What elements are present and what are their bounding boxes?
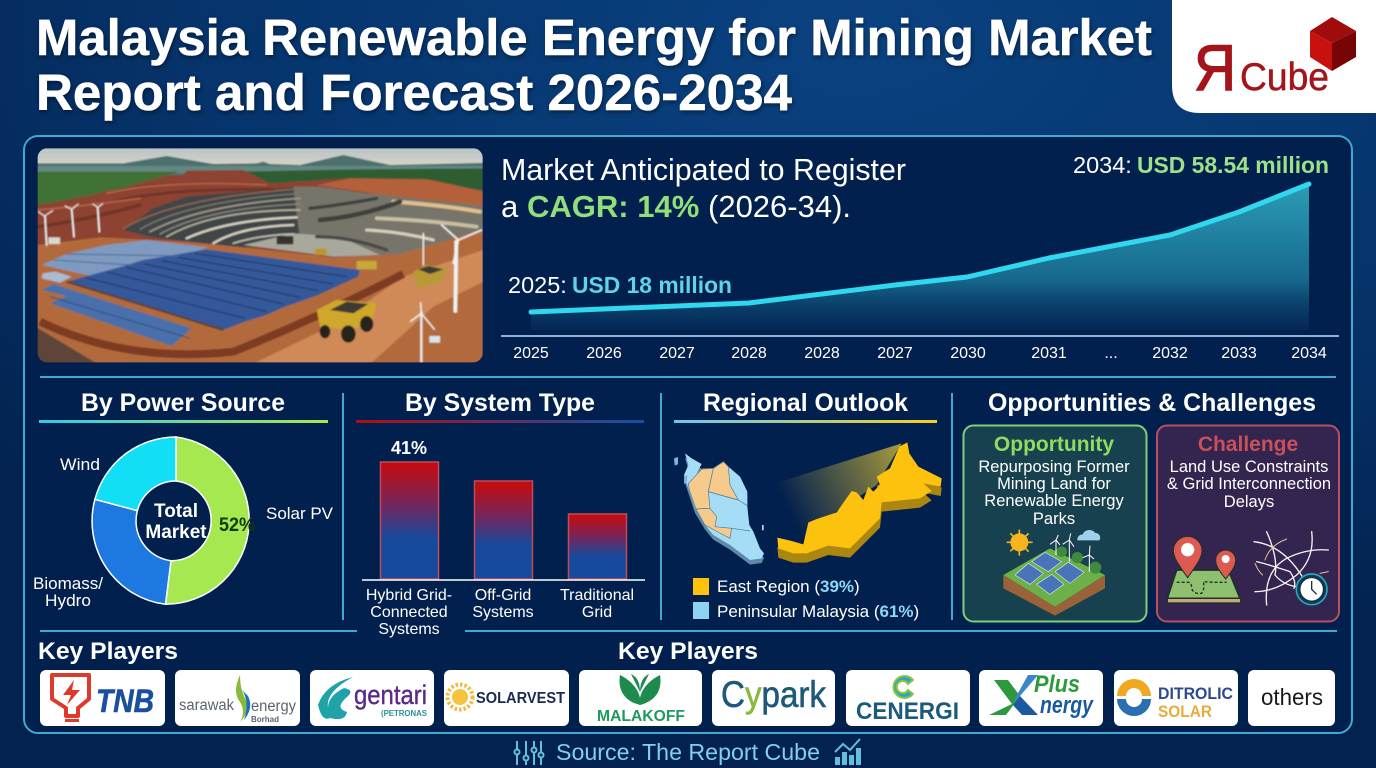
donut chart: power source share: Biomass/	[33, 575, 103, 593]
logo card: Ditrolic Solar	[1114, 670, 1238, 726]
heading: By System Type	[356, 389, 644, 423]
heading: Key Players left: Key Players	[38, 638, 178, 665]
heading: By System Type: By System Type	[405, 389, 595, 417]
heading: Opportunities and Challenges: Opportunities & Challenges	[988, 389, 1316, 417]
logo card: Gentari: gentari	[354, 680, 427, 710]
logo card: Gentari	[310, 670, 434, 726]
market growth heading: Market Anticipated to Register	[501, 152, 906, 187]
logo card: Ditrolic Solar: SOLAR	[1158, 702, 1212, 721]
icon: rising bar chart	[835, 739, 861, 765]
logo card: Sarawak Energy: sarawak	[179, 697, 234, 714]
logo card: others	[1248, 670, 1335, 726]
logo card: Sarawak Energy: energy	[251, 698, 296, 715]
bar chart: system type: Systems	[378, 621, 440, 638]
source line: Source: The Report Cube	[556, 739, 820, 765]
line chart: market size forecast: 2025	[513, 345, 549, 362]
bar chart: system type: Connected	[370, 604, 448, 621]
panel: challenge: & Grid Interconnection	[1167, 475, 1331, 493]
logo card: XPlus Energy: Plus	[1034, 671, 1080, 698]
logo card: Cenergi	[846, 670, 970, 726]
donut chart: power source share: Market	[145, 522, 207, 543]
line chart: market size forecast: 2026	[586, 345, 622, 362]
line chart: market size forecast: 2034:	[1073, 152, 1132, 178]
logo card: others: others	[1261, 684, 1323, 710]
line chart: market size forecast: 2027	[659, 345, 695, 362]
icon: map with location pins	[1167, 536, 1241, 603]
heading: Key Players right: Key Players	[618, 638, 758, 665]
logo card: Gentari: (PETRONAS	[381, 709, 428, 718]
line chart: market size forecast: ...	[1104, 345, 1118, 362]
donut chart: power source share: Hydro	[45, 592, 91, 610]
donut chart: power source share: Total	[154, 501, 198, 522]
map legend: 61%)	[880, 602, 919, 621]
panel: opportunity	[964, 426, 1146, 622]
logo card: XPlus Energy	[979, 670, 1103, 726]
market growth heading: a	[501, 189, 519, 224]
logo card: XPlus Energy: nergy	[1040, 692, 1094, 719]
logo card: Cypark	[712, 670, 835, 726]
map legend	[693, 577, 919, 621]
line chart: market size forecast	[501, 152, 1339, 362]
line chart: market size forecast: 2033	[1221, 345, 1257, 362]
bar chart: system type: Off-Grid	[475, 587, 531, 604]
line chart: market size forecast: USD 58.54 million	[1137, 152, 1329, 178]
donut chart: power source share: Solar PV	[266, 505, 333, 523]
heading: By Power Source: By Power Source	[81, 389, 285, 417]
panel: opportunity: Opportunity	[994, 433, 1114, 456]
line chart: market size forecast: 2030	[950, 345, 986, 362]
map legend: East Region (	[717, 577, 820, 596]
logo card: TNB	[40, 670, 165, 726]
bar chart: system type	[362, 438, 645, 638]
bar chart: system type: Traditional	[560, 587, 634, 604]
panel: challenge: Land Use Constraints	[1170, 458, 1328, 476]
logo card: Solarvest	[444, 670, 569, 726]
donut chart: power source share: 52%	[219, 515, 255, 536]
bar chart: system type: 41%	[391, 438, 427, 458]
logo card: Sarawak Energy: Borhad	[251, 714, 279, 724]
line chart: market size forecast: 2028	[804, 345, 840, 362]
title	[36, 9, 1152, 121]
logo: RCube	[1172, 0, 1376, 113]
logo card: TNB: TNB	[96, 683, 154, 719]
solar panel rows	[42, 240, 208, 276]
panel: challenge: Challenge	[1198, 433, 1298, 456]
line chart: market size forecast: 2027	[877, 345, 913, 362]
logo card: Sarawak Energy	[175, 670, 300, 726]
donut chart: power source share: Wind	[60, 456, 100, 474]
icon: tangled grid lines with clock	[1254, 532, 1328, 605]
line chart: market size forecast: 2032	[1152, 345, 1188, 362]
bar chart: system type: Hybrid Grid-	[366, 587, 452, 604]
bar chart: system type: Grid	[582, 604, 612, 621]
panel: opportunity: Mining Land for	[997, 475, 1111, 493]
section dividers	[40, 377, 1337, 631]
market growth heading: (2026-34).	[708, 189, 851, 224]
map: Malaysia regions	[674, 442, 942, 565]
haul trucks	[317, 300, 377, 343]
icon: sliders	[514, 741, 544, 765]
panel: challenge: Delays	[1224, 493, 1274, 511]
logo card: Malakoff	[579, 670, 702, 726]
title: Malaysia Renewable Energy for Mining Market	[36, 9, 1152, 66]
market growth heading	[501, 152, 906, 224]
main panel	[24, 136, 1352, 733]
heading: Regional Outlook	[674, 389, 937, 423]
heading: By Power Source	[39, 389, 328, 423]
icon: solar and wind land parcel	[1003, 530, 1105, 616]
map legend: 39%)	[820, 577, 860, 596]
panel: opportunity: Parks	[1033, 510, 1075, 528]
title: Report and Forecast 2026-2034	[36, 64, 793, 121]
logo: RCube: Cube	[1240, 56, 1329, 99]
bar chart: system type: Systems	[472, 604, 534, 621]
panel: opportunity: Repurposing Former	[978, 458, 1130, 476]
panel: opportunity: Renewable Energy	[984, 492, 1124, 510]
line chart: market size forecast: 2025:	[508, 272, 567, 298]
wind turbines	[38, 204, 482, 367]
east Malaysia	[777, 442, 942, 563]
line chart: market size forecast: USD 18 million	[572, 272, 732, 298]
logo: RCube: Я	[1194, 31, 1236, 104]
logo card: Solarvest: SOLARVEST	[476, 690, 565, 707]
peninsular Malaysia	[674, 453, 764, 565]
panel: challenge	[1157, 426, 1339, 622]
logo card: Ditrolic Solar: DITROLIC	[1158, 684, 1233, 703]
line chart: market size forecast: 2034	[1291, 345, 1327, 362]
heading: Regional Outlook: Regional Outlook	[703, 389, 908, 417]
donut chart: power source share	[33, 437, 333, 610]
map legend: Peninsular Malaysia (	[717, 602, 880, 621]
line chart: market size forecast: 2031	[1031, 345, 1067, 362]
photo: open-pit mine with solar farm	[38, 148, 483, 362]
market growth heading: CAGR: 14%	[527, 189, 699, 224]
line chart: market size forecast: 2028	[731, 345, 767, 362]
logo card: Malakoff: MALAKOFF	[597, 708, 685, 725]
logo card: Cenergi: CENERGI	[856, 698, 959, 725]
logo card: Cypark: Cypark	[721, 674, 826, 715]
